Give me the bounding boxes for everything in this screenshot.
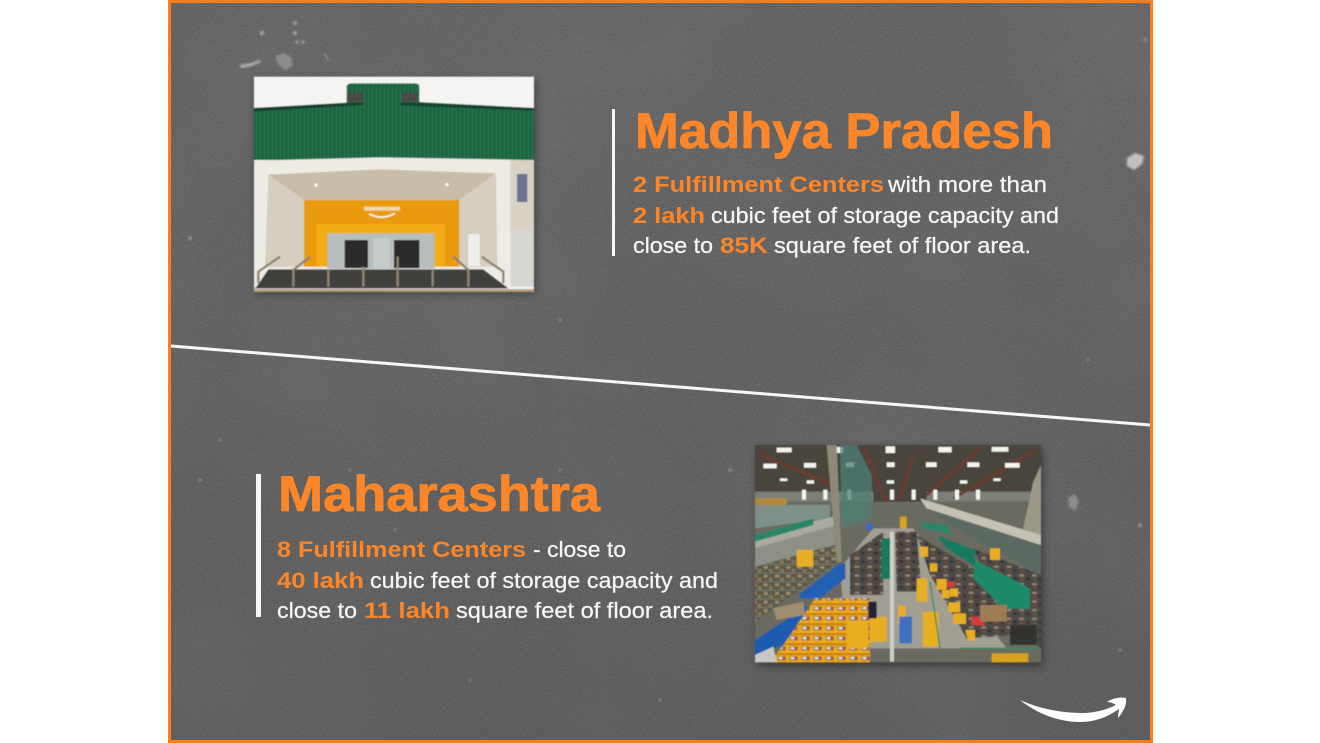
text block: Maharashtra details: 11 lakh xyxy=(364,598,450,623)
icon: Amazon smile arrow logo xyxy=(1020,698,1126,722)
text block: Madhya Pradesh details: 2 Fulfillment Centers xyxy=(633,172,884,197)
text block: Maharashtra details: square feet of floor area. xyxy=(456,598,713,623)
text block: Maharashtra details: cubic feet of storage capacity and xyxy=(370,568,718,593)
vertical bar: Maharashtra xyxy=(256,474,261,617)
text block: Madhya Pradesh details: close to xyxy=(633,233,713,258)
text block: Maharashtra details: 40 lakh xyxy=(277,568,364,593)
photo: Madhya Pradesh fulfillment center entrance xyxy=(254,77,536,294)
heading: Madhya Pradesh: Madhya Pradesh xyxy=(635,103,1053,159)
vertical bar: Madhya Pradesh xyxy=(612,109,615,256)
text block: Madhya Pradesh details: cubic feet of storage capacity and xyxy=(711,203,1059,228)
text block: Madhya Pradesh details: square feet of floor area. xyxy=(774,233,1031,258)
text block: Madhya Pradesh details: with more than xyxy=(887,172,1047,197)
diagonal divider line xyxy=(171,346,1150,425)
text block: Madhya Pradesh details: 2 lakh xyxy=(633,203,705,228)
text block: Maharashtra details: - close to xyxy=(533,537,626,562)
text block: Madhya Pradesh details xyxy=(633,172,1059,258)
panel: textured grey background with orange frame xyxy=(168,0,1153,743)
heading: Maharashtra: Maharashtra xyxy=(278,466,601,522)
text block: Madhya Pradesh details: 85K xyxy=(720,233,769,258)
photo: Maharashtra warehouse interior xyxy=(755,445,1043,666)
text block: Maharashtra details: 8 Fulfillment Centers xyxy=(277,537,526,562)
text block: Maharashtra details xyxy=(277,537,718,623)
text block: Maharashtra details: close to xyxy=(277,598,357,623)
